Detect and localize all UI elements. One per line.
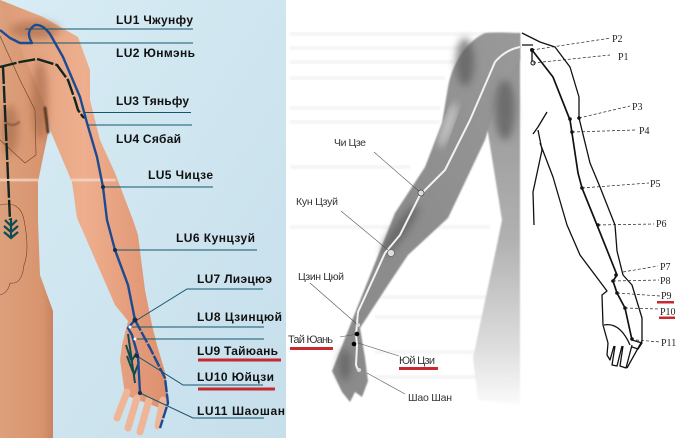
hollow point P1 bbox=[531, 61, 535, 65]
arm bbox=[0, 0, 168, 410]
label: P2: P2 bbox=[612, 34, 623, 45]
label: LU4: LU4 Сябай bbox=[116, 132, 181, 146]
label: LU7: LU7 Лиэцюэ bbox=[197, 272, 272, 286]
label: P4: P4 bbox=[639, 126, 650, 137]
meridian white line bbox=[356, 47, 520, 370]
arm outlines bbox=[522, 33, 642, 368]
label: Кун Цзуй: Кун Цзуй bbox=[296, 196, 338, 208]
label: P3: P3 bbox=[632, 102, 643, 113]
leaders bbox=[310, 152, 421, 394]
highlight on biceps bbox=[435, 101, 461, 149]
leader lines bbox=[25, 29, 264, 418]
icon: green tree on abdomen bbox=[4, 218, 18, 238]
label: LU6: LU6 Кунцзуй bbox=[176, 231, 255, 245]
label: LU3: LU3 Тяньфу bbox=[116, 94, 189, 108]
panel: line drawing arm bbox=[522, 33, 676, 368]
label: LU8: LU8 Цзинцюй bbox=[197, 310, 282, 324]
label: P9: P9 bbox=[661, 291, 672, 302]
shoulder and armpit shading bbox=[2, 21, 60, 155]
fingers bbox=[117, 392, 163, 432]
label: LU5: LU5 Чицзе bbox=[148, 168, 213, 182]
muscle shading bbox=[339, 38, 515, 381]
arm bbox=[332, 33, 520, 402]
torso bbox=[0, 0, 60, 438]
label: Юй Цзи: Юй Цзи bbox=[399, 355, 435, 367]
label: P11: P11 bbox=[661, 338, 676, 349]
icon: green tree on hand bbox=[126, 334, 139, 383]
meridian line bbox=[532, 50, 632, 340]
faint background text strips bbox=[290, 32, 520, 379]
label: LU1: LU1 Чжунфу bbox=[116, 13, 193, 27]
acupoint dots bbox=[101, 185, 142, 395]
label: LU2: LU2 Юнмэнь bbox=[116, 46, 195, 60]
leaders bbox=[532, 38, 660, 342]
red underline P10 bbox=[659, 316, 675, 319]
panel: colour anatomy arm with LU points bbox=[0, 0, 286, 438]
label: LU10: LU10 Юйцзи bbox=[197, 370, 274, 384]
label: P7: P7 bbox=[660, 262, 671, 273]
label: Цзин Цюй: Цзин Цюй bbox=[298, 271, 344, 283]
label: P6: P6 bbox=[656, 219, 667, 230]
label: Шао Шан: Шао Шан bbox=[408, 392, 452, 404]
label: P1: P1 bbox=[618, 52, 629, 63]
red underline LU9 bbox=[198, 358, 281, 362]
label: LU9: LU9 Тайюань bbox=[197, 344, 278, 358]
red underline LU10 bbox=[198, 388, 275, 390]
label: LU11: LU11 Шаошан bbox=[197, 404, 285, 418]
label: Чи Цзе: Чи Цзе bbox=[334, 137, 366, 149]
acupoint dots bbox=[352, 190, 424, 372]
panel: greyscale arm bbox=[288, 32, 520, 405]
acupoint dots bbox=[530, 48, 634, 341]
red underline P9 bbox=[657, 301, 674, 304]
label: P10: P10 bbox=[660, 307, 676, 318]
icon: blue meridian line bbox=[0, 25, 168, 428]
label: P5: P5 bbox=[650, 179, 661, 190]
torso bbox=[473, 33, 520, 405]
red underline Юй Цзи bbox=[399, 367, 438, 370]
red underline Тай Юань bbox=[290, 347, 333, 350]
icon: black dashed meridian bbox=[0, 59, 86, 220]
thin organ outlines bbox=[0, 36, 36, 295]
label: P8: P8 bbox=[660, 276, 671, 287]
label: Тай Юань: Тай Юань bbox=[288, 334, 333, 346]
